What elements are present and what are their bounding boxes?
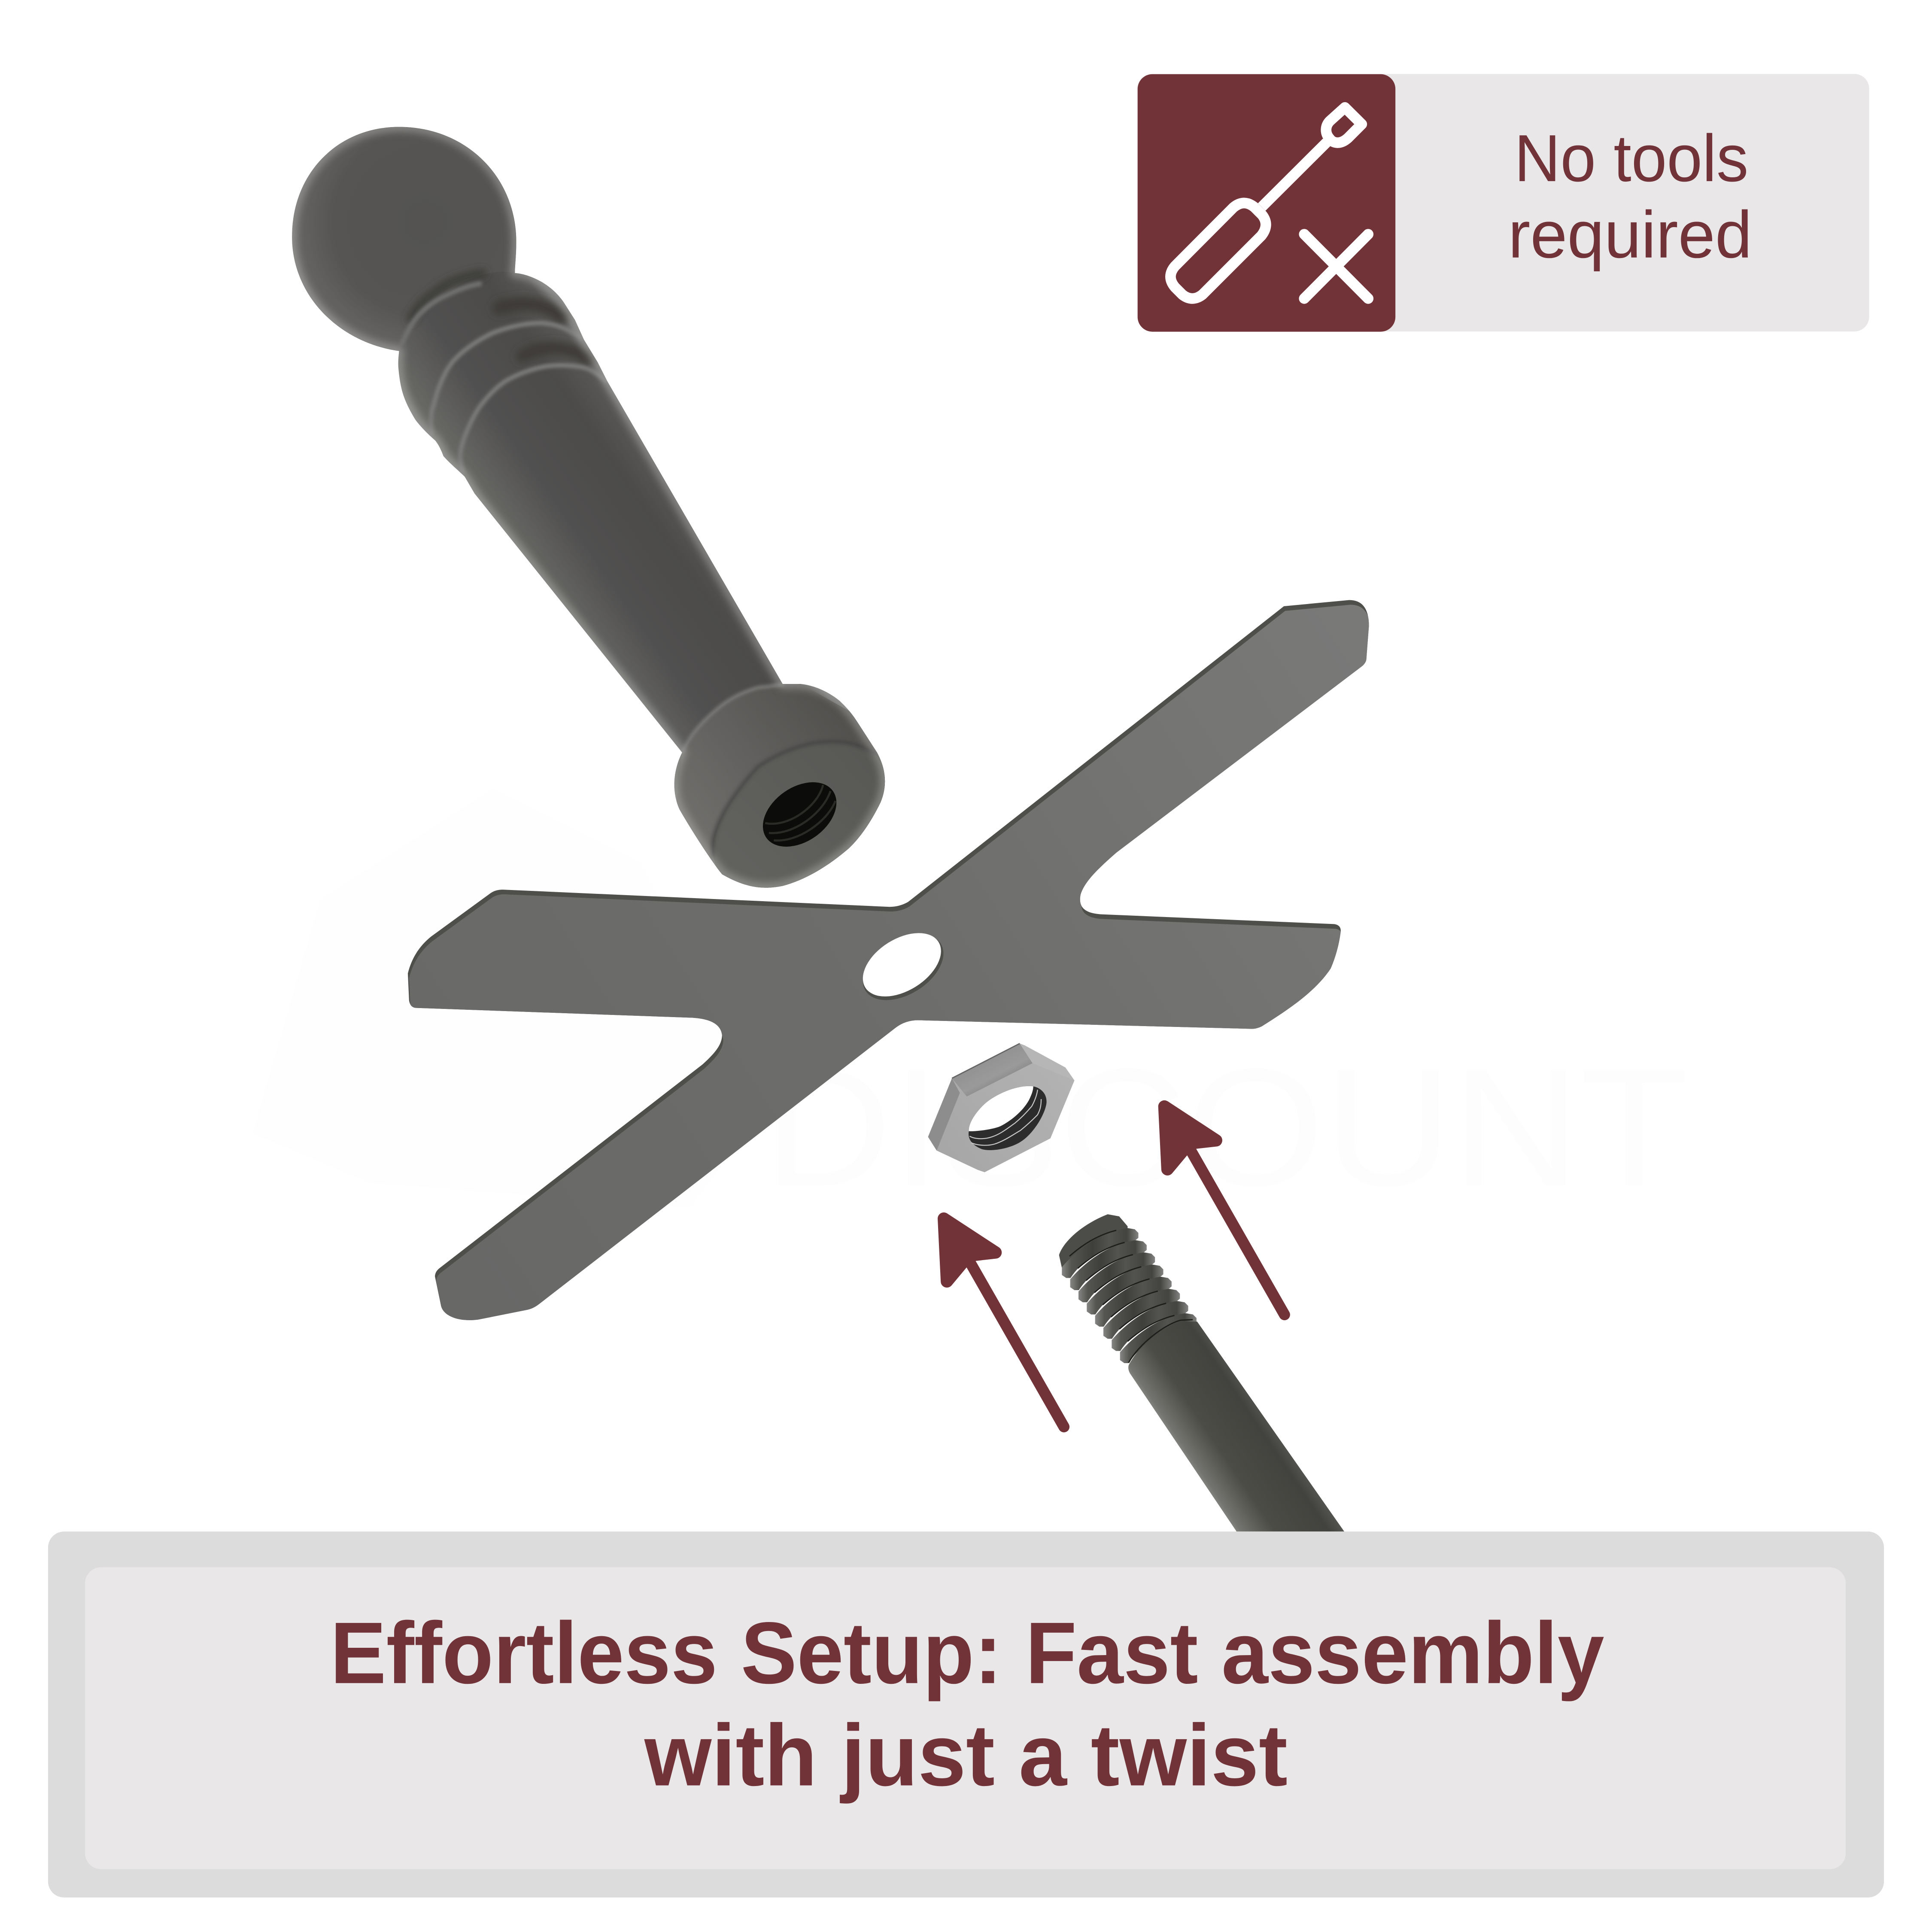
badge label: required [1508, 197, 1752, 272]
faint background watermark [252, 789, 1688, 1221]
inner panel [85, 1567, 1846, 1869]
caption text: Effortless Setup: Fast assembly [330, 1604, 1604, 1702]
badge: no tools required [1137, 74, 1869, 332]
foot end face [712, 741, 899, 899]
badge label [1508, 121, 1752, 272]
hex nut [928, 1044, 1075, 1172]
handle finial: ball, collar, tapered body and threaded foot [283, 117, 899, 905]
icon: cross [1304, 234, 1368, 298]
caption text: with just a twist [644, 1707, 1288, 1804]
badge background [1137, 74, 1869, 331]
faint background watermark: DISCOUNT [764, 1034, 1688, 1221]
thread ridges [1062, 1228, 1197, 1363]
soft light rim [292, 127, 885, 888]
arrow: right insertion arrow [1164, 1106, 1285, 1315]
threaded nut opening [969, 1086, 1047, 1150]
threaded rod [1059, 1214, 1344, 1531]
cross-shaped metal bracket [408, 600, 1370, 1325]
icon tile [1138, 74, 1395, 332]
threaded bore [751, 769, 848, 860]
caption text [330, 1604, 1604, 1804]
mounting hole [851, 920, 955, 1014]
rod shaft [1128, 1321, 1344, 1531]
bottom caption panel [48, 1531, 1884, 1898]
badge label: No tools [1514, 121, 1748, 195]
flared foot [665, 684, 899, 899]
arrow: left insertion arrow [944, 1218, 1064, 1427]
ball knob [292, 127, 516, 351]
outer panel [48, 1531, 1884, 1898]
icon: screwdriver [1170, 107, 1362, 298]
collar shading [402, 273, 606, 471]
rod tip chamfer [1059, 1214, 1128, 1268]
